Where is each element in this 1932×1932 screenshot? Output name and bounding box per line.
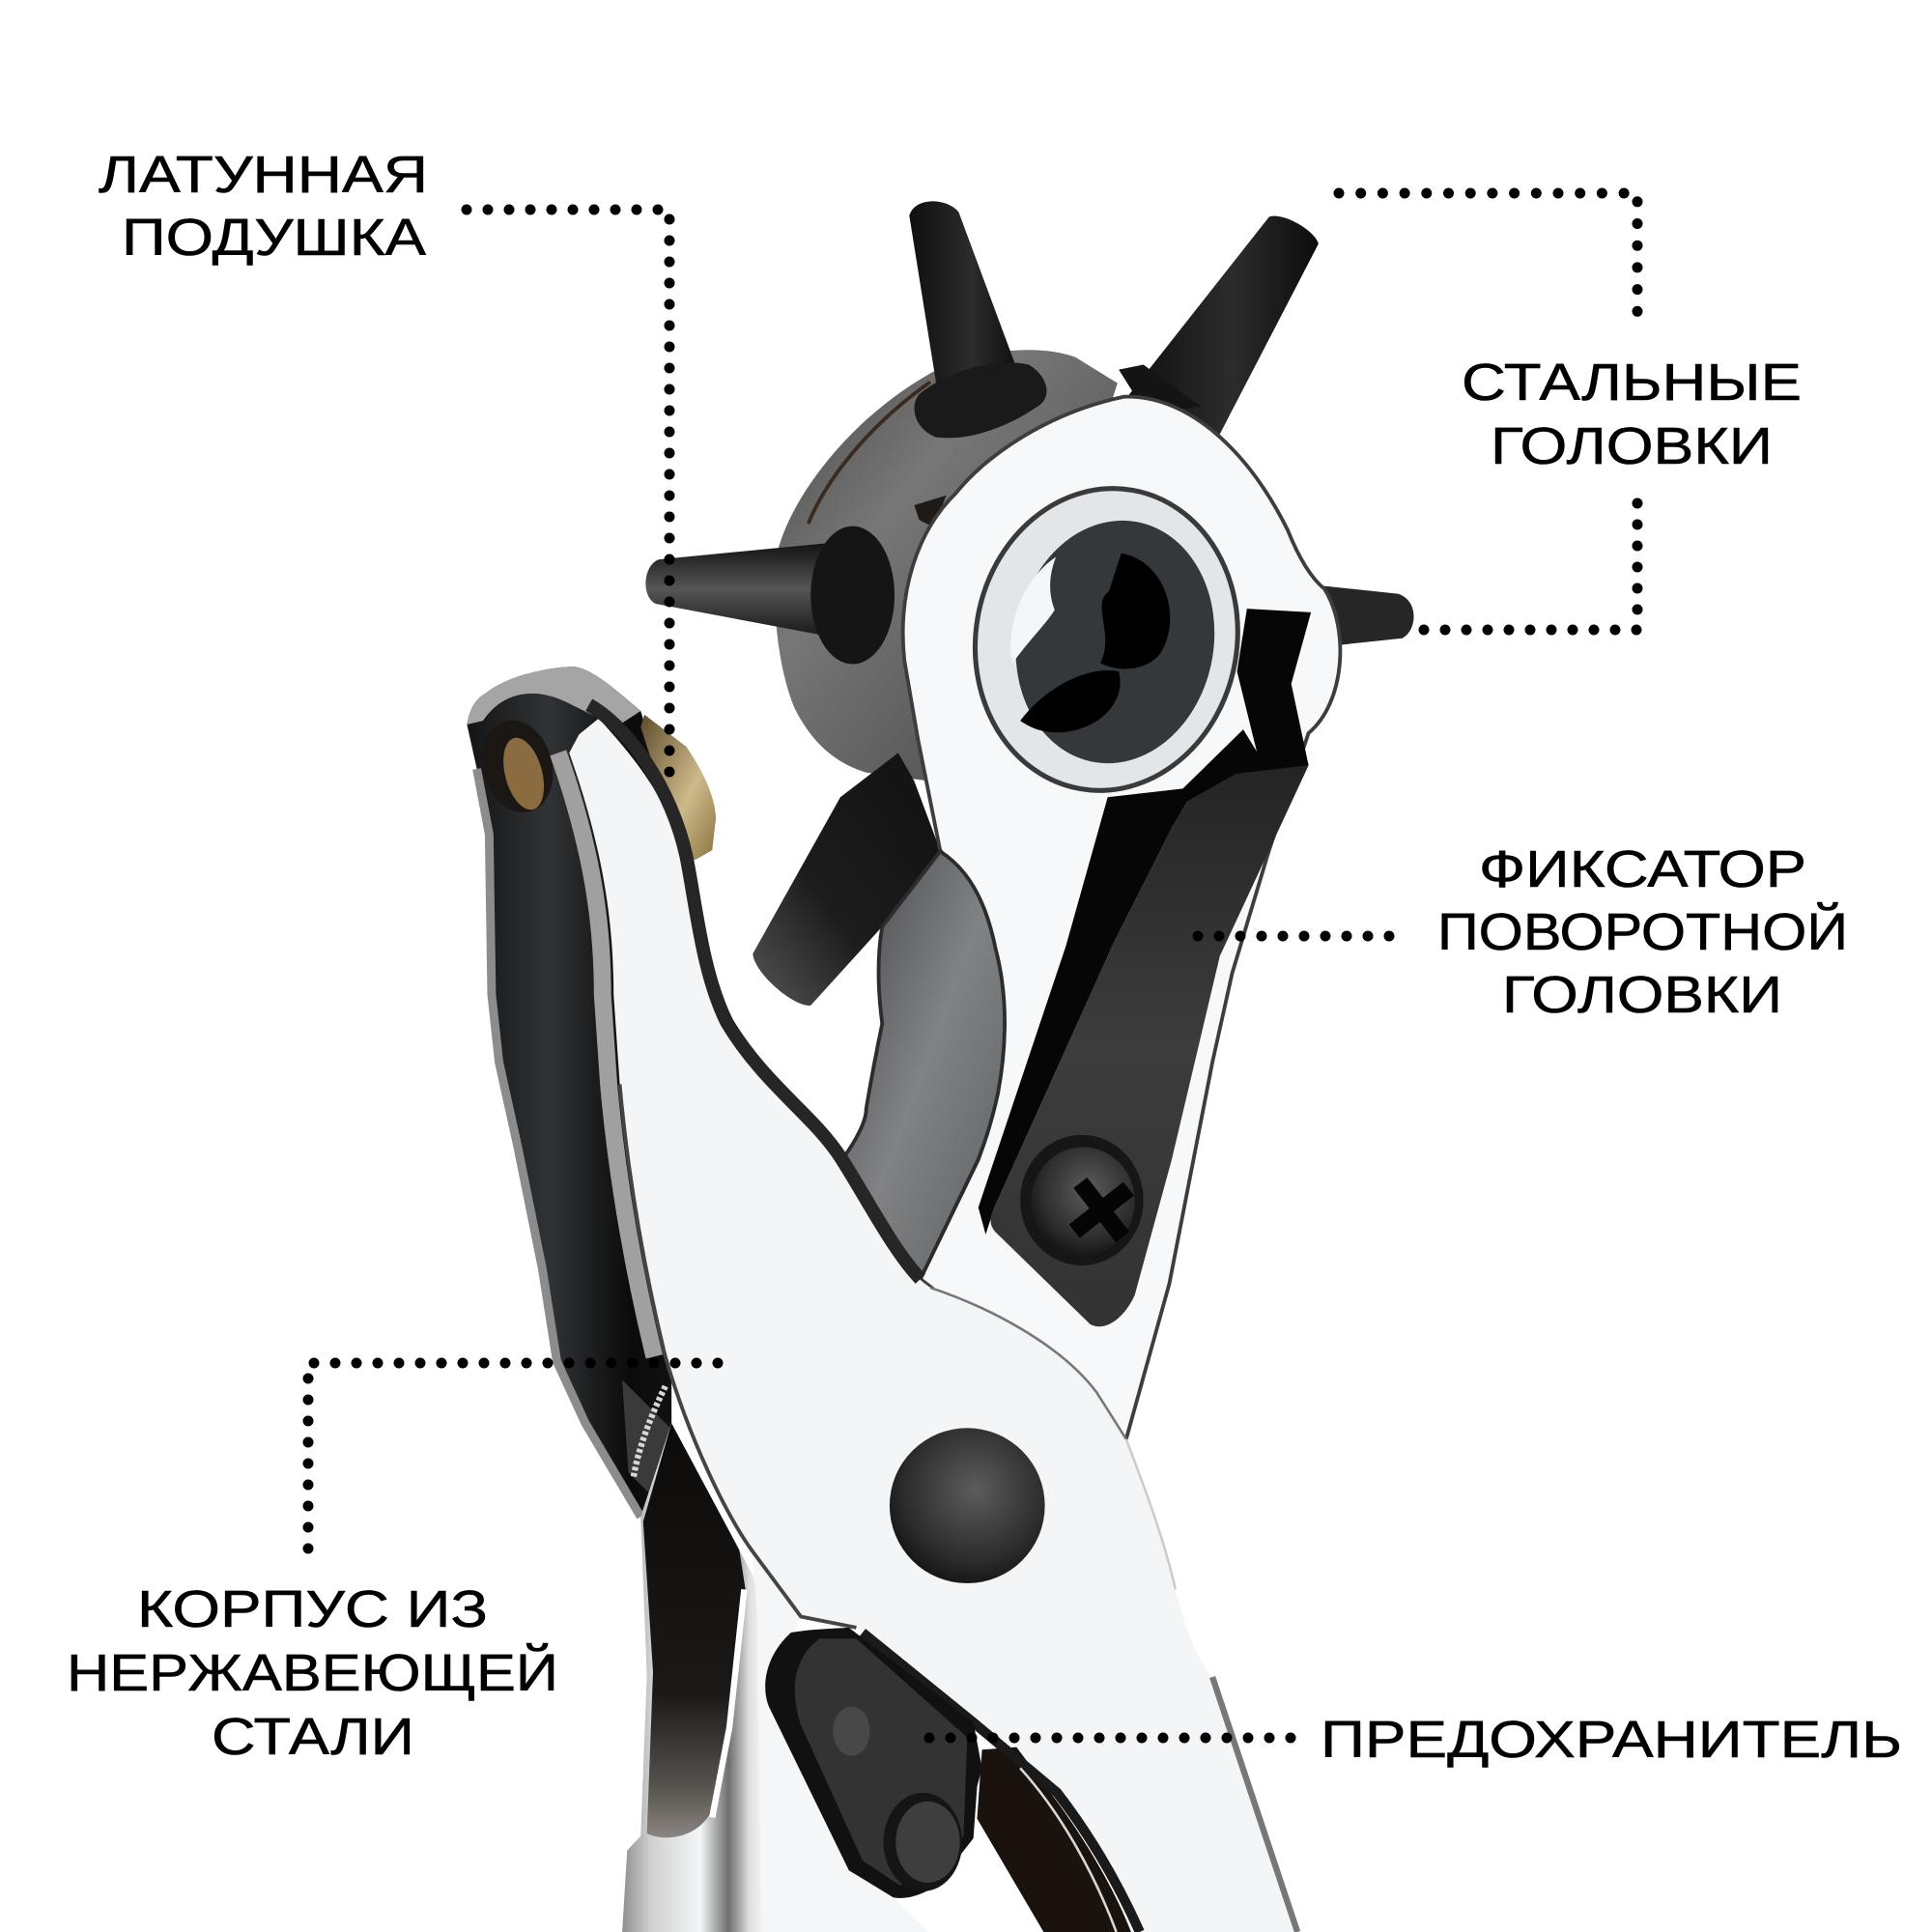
label: rotary head lock: ГОЛОВКИ bbox=[1502, 966, 1782, 1024]
head: top right bbox=[1119, 216, 1319, 446]
label: rotary head lock: ПОВОРОТНОЙ bbox=[1437, 902, 1848, 961]
safety catch bbox=[765, 1628, 982, 1898]
head: right bbox=[1306, 584, 1413, 645]
head: lower left bbox=[753, 753, 940, 1006]
latch screw bbox=[1020, 1135, 1150, 1265]
label: steel heads bbox=[1462, 354, 1802, 475]
locking latch bbox=[979, 609, 1311, 1326]
pivot hole bbox=[952, 468, 1262, 811]
punch heads bbox=[645, 201, 1413, 1006]
label: stainless steel body: СТАЛИ bbox=[212, 1708, 414, 1766]
latch grey face bbox=[990, 765, 1309, 1326]
tool photo: rotary hole punch pliers bbox=[467, 201, 1413, 1932]
rotating drum bbox=[775, 350, 1118, 788]
leader: head lock bbox=[1198, 931, 1410, 941]
dark wedge between handles bbox=[863, 1633, 1140, 1932]
leader: brass pad bbox=[467, 210, 669, 784]
leader: steel heads top bbox=[1339, 193, 1637, 312]
channel bbox=[643, 1423, 746, 1837]
label: stainless steel body: КОРПУС ИЗ bbox=[137, 1580, 488, 1638]
label: stainless steel body bbox=[67, 1580, 558, 1766]
worn brass hole in the hook bbox=[472, 712, 563, 820]
label: steel heads: ГОЛОВКИ bbox=[1491, 417, 1773, 475]
brass pad bbox=[640, 715, 716, 860]
front steel plate with handle bbox=[569, 705, 1297, 1932]
upper steel plate with neck bbox=[903, 397, 1340, 1439]
latch black side bbox=[979, 609, 1311, 1235]
label: brass pad: ПОДУШКА bbox=[122, 209, 426, 267]
head: top bbox=[909, 201, 1047, 438]
lower tube bbox=[622, 1423, 764, 1932]
label: brass pad bbox=[99, 146, 428, 267]
label: stainless steel body: НЕРЖАВЕЮЩЕЙ bbox=[67, 1643, 558, 1702]
label: rotary head lock: ФИКСАТОР bbox=[1479, 840, 1806, 898]
leader: safety catch bbox=[929, 1733, 1301, 1743]
central rivet bbox=[890, 1428, 1045, 1583]
label: brass pad: ЛАТУННАЯ bbox=[99, 146, 428, 204]
leader: stainless body bbox=[308, 1363, 739, 1548]
plain surface below the catch bbox=[752, 1550, 929, 1932]
label: steel heads: СТАЛЬНЫЕ bbox=[1462, 354, 1802, 412]
head: left bbox=[645, 526, 895, 664]
grey inner neck bbox=[844, 851, 1005, 1279]
label: safety catch: ПРЕДОХРАНИТЕЛЬ bbox=[1321, 1711, 1902, 1769]
label: rotary head lock bbox=[1437, 840, 1848, 1024]
rear handle bbox=[467, 667, 929, 1932]
leader: steel heads bottom bbox=[1423, 503, 1637, 630]
